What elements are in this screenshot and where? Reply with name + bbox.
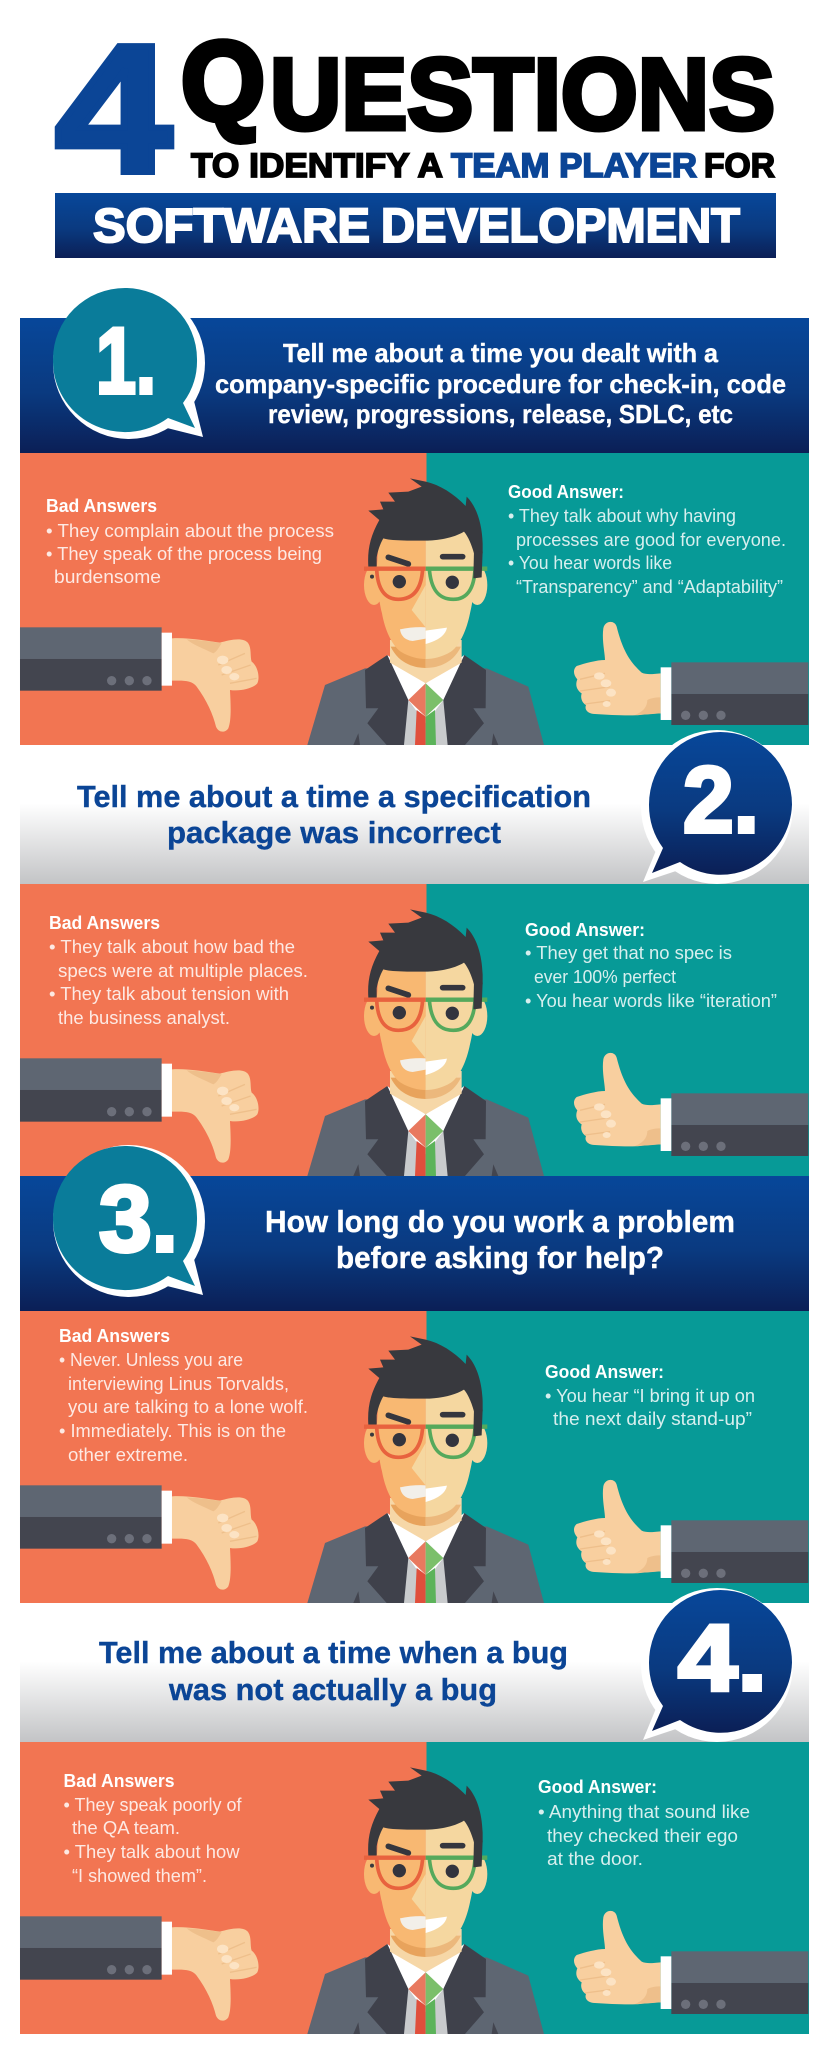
good answer text: • You hear words like bbox=[508, 553, 672, 573]
speech bubble: number 3 bbox=[53, 1145, 205, 1297]
good answer text: • Anything that sound like bbox=[538, 1802, 750, 1822]
good answer text: Good Answer: bbox=[538, 1777, 657, 1797]
bad answers text: • They talk about how bad the bbox=[49, 937, 295, 957]
panel: question 4 banner: Tell me about a time when a bug bbox=[99, 1635, 568, 1670]
bad answers text: • They complain about the process bbox=[46, 521, 334, 541]
title banner: software development bbox=[55, 193, 776, 258]
bad answers text: other extreme. bbox=[68, 1445, 188, 1465]
panel: question 2 answers bbox=[20, 884, 809, 1176]
bad answers text: the business analyst. bbox=[58, 1008, 230, 1028]
bad answers text: the QA team. bbox=[72, 1818, 180, 1838]
title word Questions: UESTIONS bbox=[270, 39, 775, 151]
good answer text: Good Answer: bbox=[545, 1362, 664, 1382]
speech bubble: number 1 bbox=[53, 287, 205, 439]
good answer text: • You hear “I bring it up on bbox=[545, 1386, 755, 1406]
good answer text bbox=[545, 1362, 755, 1429]
good answer text: Good Answer: bbox=[525, 920, 645, 940]
title word Questions: Q bbox=[181, 19, 265, 144]
illustration: man with thumbs down and thumbs up bbox=[20, 1311, 809, 1603]
bad answers text: Bad Answers bbox=[64, 1771, 174, 1791]
good answer text: at the door. bbox=[547, 1849, 643, 1869]
illustration: man with thumbs down and thumbs up bbox=[20, 1742, 809, 2034]
speech bubble: number 1: 1. bbox=[96, 308, 156, 413]
bad answers text: burdensome bbox=[54, 567, 161, 587]
bad answers text: • Never. Unless you are bbox=[59, 1350, 243, 1370]
speech bubble: number 4: 4. bbox=[678, 1605, 767, 1710]
bad answers text: • They speak of the process being bbox=[46, 544, 322, 564]
bad answers text bbox=[46, 496, 334, 587]
bad answers text: • They talk about how bbox=[64, 1842, 241, 1862]
good answer text: • They get that no spec is bbox=[525, 943, 732, 963]
bad answers text: Bad Answers bbox=[49, 913, 160, 933]
panel: question 1 banner: company-specific procedure for check-in, code bbox=[215, 369, 786, 399]
good answer text: ever 100% perfect bbox=[534, 967, 676, 987]
good answer text: Good Answer: bbox=[508, 482, 624, 502]
bad answers text: Bad Answers bbox=[59, 1326, 170, 1346]
panel: question 3 answers bbox=[20, 1311, 809, 1603]
bad answers text: specs were at multiple places. bbox=[58, 961, 308, 981]
good answer text: • They talk about why having bbox=[508, 506, 736, 526]
speech bubble: number 2: 2. bbox=[683, 747, 759, 852]
bad answers text bbox=[64, 1771, 242, 1886]
panel: question 2 banner bbox=[20, 745, 809, 884]
good answer text: the next daily stand-up” bbox=[553, 1409, 752, 1429]
panel: question 1 banner: Tell me about a time you dealt with a bbox=[283, 338, 719, 368]
good answer text bbox=[538, 1777, 750, 1869]
panel: question 4 banner bbox=[20, 1603, 809, 1742]
bad answers text: “I showed them”. bbox=[72, 1866, 207, 1886]
speech bubble: number 2 bbox=[641, 730, 793, 884]
subtitle line: TO IDENTIFY A bbox=[191, 147, 443, 185]
good answer text bbox=[508, 482, 786, 597]
title bbox=[55, 6, 776, 258]
good answer text: they checked their ego bbox=[547, 1826, 738, 1846]
speech bubble: number 4 bbox=[641, 1588, 793, 1742]
panel: question 1 banner: review, progressions, release, SDLC, etc bbox=[268, 399, 733, 429]
panel: question 3 banner bbox=[20, 1176, 809, 1311]
panel: question 2 banner: Tell me about a time a specification bbox=[77, 779, 591, 814]
panel: question 3 banner: How long do you work a problem bbox=[265, 1204, 735, 1239]
good answer text: “Transparency” and “Adaptability” bbox=[516, 577, 783, 597]
panel: question 3 banner: before asking for help? bbox=[336, 1240, 664, 1275]
panel: question 2 banner: package was incorrect bbox=[167, 815, 501, 850]
good answer text: • You hear words like “iteration” bbox=[525, 991, 777, 1011]
subtitle line: TEAM PLAYER bbox=[451, 147, 697, 185]
bad answers text: you are talking to a lone wolf. bbox=[68, 1397, 308, 1417]
panel: question 1 banner bbox=[20, 318, 809, 453]
subtitle line: FOR bbox=[704, 147, 775, 185]
good answer text: processes are good for everyone. bbox=[516, 530, 786, 550]
subtitle line bbox=[191, 147, 775, 185]
speech bubble: number 3: 3. bbox=[99, 1166, 178, 1271]
bad answers text: • Immediately. This is on the bbox=[59, 1421, 286, 1441]
illustration: man with thumbs down and thumbs up bbox=[20, 453, 809, 745]
bad answers text bbox=[59, 1326, 308, 1465]
title numeral 4: 4 bbox=[55, 6, 172, 211]
title banner: software development: SOFTWARE bbox=[93, 200, 370, 253]
bad answers text bbox=[49, 913, 308, 1028]
bad answers text: Bad Answers bbox=[46, 496, 157, 516]
panel: question 1 answers bbox=[20, 453, 809, 745]
title banner: software development: DEVELOPMENT bbox=[381, 200, 740, 253]
good answer text bbox=[525, 920, 777, 1011]
illustration: man with thumbs down and thumbs up bbox=[20, 884, 809, 1176]
bad answers text: • They talk about tension with bbox=[49, 984, 289, 1004]
bad answers text: • They speak poorly of bbox=[64, 1795, 242, 1815]
bad answers text: interviewing Linus Torvalds, bbox=[68, 1374, 289, 1394]
panel: question 4 answers bbox=[20, 1742, 809, 2034]
panel: question 4 banner: was not actually a bug bbox=[168, 1672, 497, 1707]
